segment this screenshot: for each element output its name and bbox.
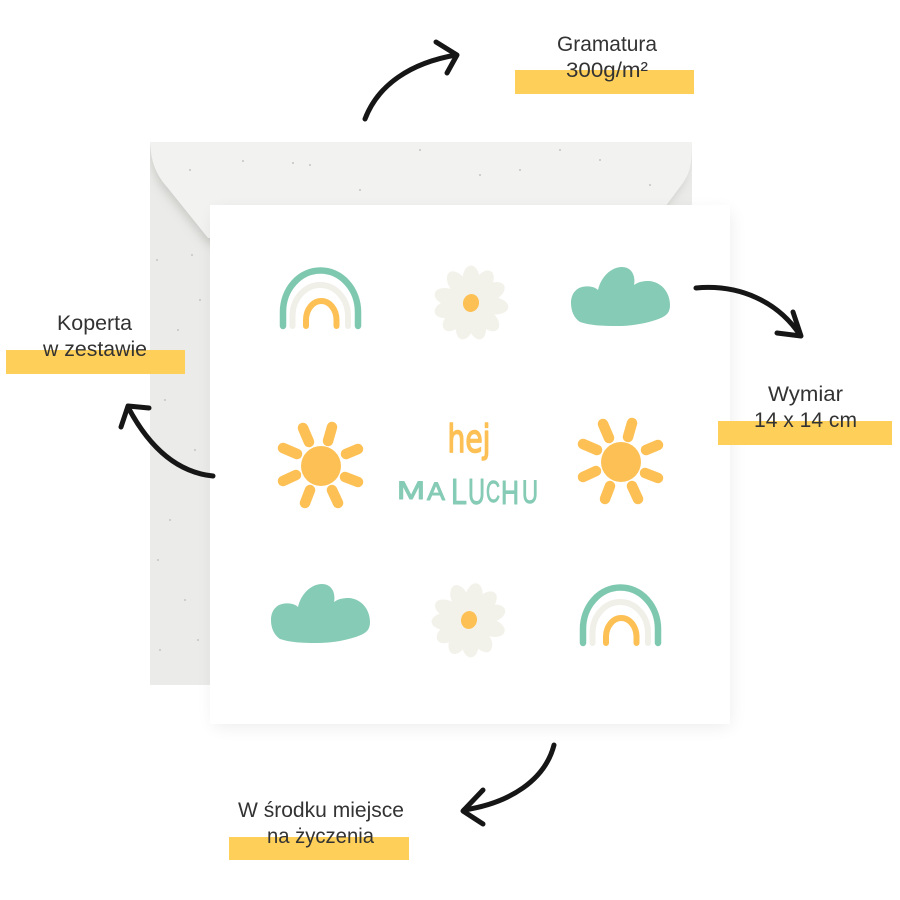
label: Wymiar: 14 x 14 cm	[754, 409, 857, 432]
icon: cloud bottom left	[271, 584, 370, 643]
label: Gramatura	[515, 33, 694, 94]
label: Koperta: Koperta	[57, 312, 132, 335]
text: maluchu: H	[501, 474, 519, 511]
text: maluchu: L	[451, 471, 467, 512]
arrow: to Wymiar	[696, 287, 801, 336]
icon: daisy bottom	[423, 575, 514, 666]
label: Gramatura: Gramatura	[557, 33, 657, 56]
envelope flap	[150, 142, 692, 238]
icon: rainbow bottom right	[583, 588, 658, 643]
icon: sun left	[283, 427, 358, 503]
icon: sun right	[583, 423, 658, 499]
card	[210, 205, 730, 724]
text: maluchu: A	[427, 478, 445, 506]
icon: rainbow top left	[283, 270, 358, 326]
label: Koperta	[6, 312, 185, 374]
icon: cloud top right	[571, 267, 670, 326]
text: hej: hej	[448, 417, 490, 461]
text: maluchu	[397, 471, 538, 512]
label: Gramatura: 300g/m²	[566, 59, 648, 82]
label: Wymiar: Wymiar	[768, 383, 843, 406]
card shadow	[214, 212, 730, 726]
label: Wymiar	[718, 383, 892, 445]
text: maluchu: M	[397, 477, 425, 505]
arrow: to Gramatura	[365, 42, 457, 119]
icon: daisy top	[433, 266, 509, 341]
envelope	[150, 142, 692, 685]
arrow: to W srodku	[463, 745, 554, 824]
label: W srodku: na życzenia	[267, 825, 374, 848]
label: W srodku	[229, 799, 409, 860]
label: W srodku: W środku miejsce	[238, 799, 404, 822]
text: maluchu: U	[468, 471, 485, 512]
text: maluchu: U	[522, 474, 538, 510]
text: maluchu: C	[486, 474, 500, 509]
label: Koperta: w zestawie	[42, 338, 147, 361]
arrow: to Koperta	[121, 406, 213, 476]
